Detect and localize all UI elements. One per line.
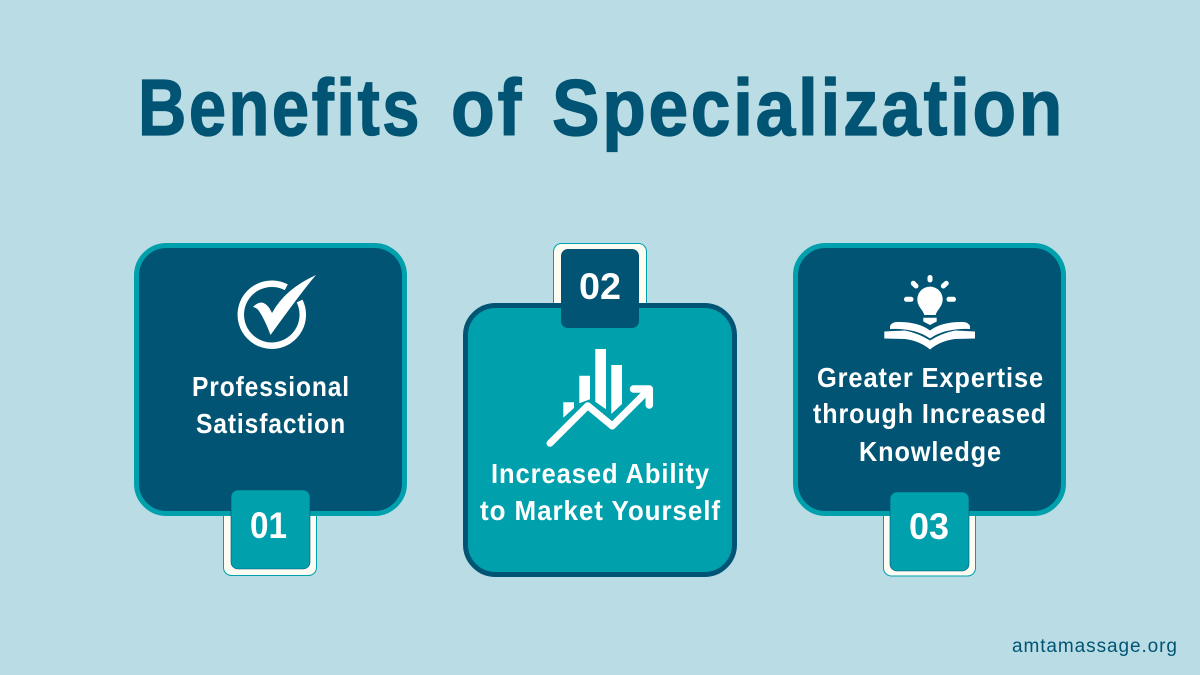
number tab 02 [561,249,639,328]
panel: greater expertise through increased knowledge [796,246,1064,576]
label: professional satisfaction: Satisfaction [196,408,346,439]
panel: increased ability to market yourself [466,244,734,574]
number tab 01 [231,490,310,569]
title: Specialization [552,63,1065,152]
number tab 03 [890,492,969,571]
card 3 [796,246,1064,514]
panel: professional satisfaction [136,246,404,576]
label: professional satisfaction: Professional [192,371,350,402]
icon: check mark in circle [241,275,316,346]
icon: light bulb over open book [884,278,975,350]
number tab backing 02 [554,244,646,318]
label: increased ability to market yourself: to Market Yourself [480,495,721,526]
number tab 03: 03 [909,506,949,547]
label: greater expertise through increased knowledge: Greater Expertise [817,362,1044,393]
label: greater expertise through increased knowledge: Knowledge [859,436,1002,467]
label: increased ability to market yourself [480,458,721,526]
title: Benefits [138,63,422,152]
card 1 [136,246,404,514]
label: greater expertise through increased knowledge [813,362,1047,467]
icon: bar chart with rising arrow [550,349,649,443]
number tab backing 01 [224,500,316,576]
number tab 02: 02 [579,266,621,307]
title [138,63,1065,152]
number tab 01: 01 [250,505,287,546]
title: of [451,63,524,152]
number tab backing 03 [884,500,976,576]
label: professional satisfaction [192,371,350,439]
card 2 [466,306,734,574]
label: increased ability to market yourself: Increased Ability [491,458,710,489]
label: greater expertise through increased knowledge: through Increased [813,398,1047,429]
website credit: amtamassage.org [1012,636,1177,657]
